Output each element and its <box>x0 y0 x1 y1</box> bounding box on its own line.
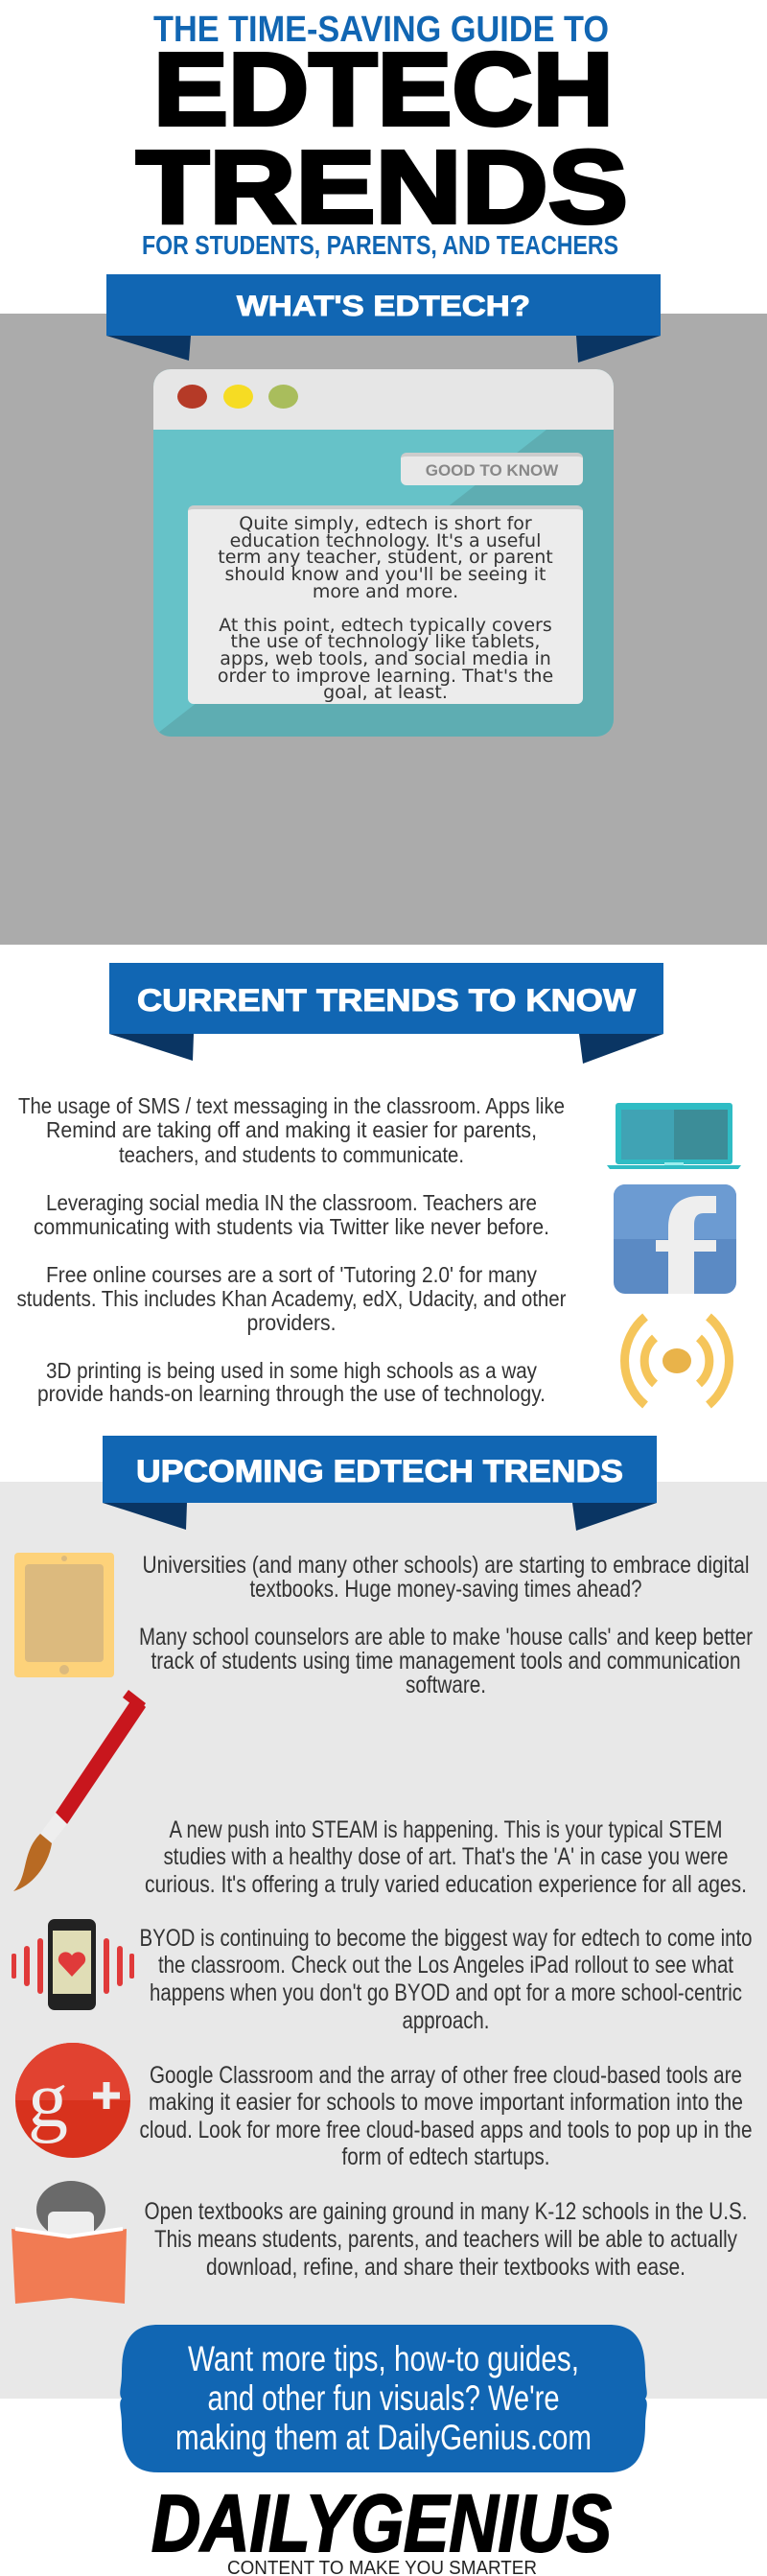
text box: definition: more and more. <box>313 581 458 602</box>
callout: DailyGenius CTA <box>120 2325 647 2472</box>
text: current trends <box>17 1093 567 1406</box>
text: house calls <box>139 1624 753 1698</box>
text box: definition <box>188 505 583 704</box>
banner: upcoming trends: UPCOMING EDTECH TRENDS <box>136 1454 623 1488</box>
icon: paint brush <box>13 1690 146 1891</box>
title: EDTECH <box>153 31 614 147</box>
icon: person reading <box>12 2181 127 2304</box>
text box: definition: the use of technology like tablets, <box>231 631 540 652</box>
text box: definition: term any teacher, student, or parent <box>218 547 553 568</box>
icon: google plus <box>15 2043 130 2158</box>
banner: what's edtech <box>106 274 661 363</box>
title: THE TIME-SAVING GUIDE TO <box>153 10 609 50</box>
text: SMS: Remind are taking off and making it easier for parents, <box>46 1117 537 1142</box>
text box: definition: goal, at least. <box>323 682 448 703</box>
icon: phone with heart <box>12 1919 134 2010</box>
browser top bar with dots <box>153 369 614 430</box>
text box: definition: At this point, edtech typically covers <box>219 615 552 636</box>
text box: definition: education technology. It's a useful <box>230 530 541 551</box>
background: light gray band upcoming <box>0 1482 767 2399</box>
text: online courses: Free online courses are a sort of 'Tutoring 2.0' for many <box>46 1262 537 1287</box>
callout: DailyGenius CTA: and other fun visuals? We're <box>207 2378 560 2418</box>
text: digital textbooks <box>142 1552 750 1603</box>
text box: definition: order to improve learning. That's the <box>218 666 553 687</box>
text: social media: Leveraging social media IN the classroom. Teachers are <box>46 1190 537 1215</box>
title <box>135 10 628 260</box>
text: 3D printing: provide hands-on learning through the use of technology. <box>37 1381 546 1406</box>
icon: wireless signal <box>620 1314 733 1408</box>
title: TRENDS <box>136 129 628 245</box>
tag: good to know: GOOD TO KNOW <box>426 461 558 480</box>
icon: facebook <box>614 1184 736 1294</box>
text: online courses <box>17 1262 567 1335</box>
text: digital textbooks: textbooks. Huge money-saving times ahead? <box>249 1576 642 1603</box>
icon: laptop <box>607 1103 741 1169</box>
text box: definition: should know and you'll be seeing it <box>225 564 546 585</box>
text: SMS: teachers, and students to communicate. <box>119 1142 464 1167</box>
text: online courses: providers. <box>247 1310 336 1335</box>
text: house calls: software. <box>406 1672 486 1698</box>
banner: what's edtech: WHAT'S EDTECH? <box>237 291 530 322</box>
text: social media <box>34 1190 549 1239</box>
text: Google Classroom: form of edtech startups. <box>341 2143 550 2170</box>
text: 3D printing <box>37 1358 546 1406</box>
text: open textbooks <box>144 2198 748 2281</box>
text: social media: communicating with students via Twitter like never before. <box>34 1214 549 1239</box>
text: BYOD <box>140 1925 752 2034</box>
banner: current trends: CURRENT TRENDS TO KNOW <box>137 983 637 1018</box>
tag: good to know <box>401 453 583 485</box>
icon: tablet <box>14 1553 114 1677</box>
text: BYOD: approach. <box>403 2007 489 2034</box>
text box: definition: Quite simply, edtech is short for <box>239 513 532 534</box>
background: gray band what's edtech <box>0 314 767 945</box>
text box: definition: apps, web tools, and social media in <box>220 648 551 669</box>
banner: upcoming trends <box>103 1436 657 1531</box>
text: open textbooks: download, refine, and share their textbooks with ease. <box>206 2254 686 2281</box>
text: SMS <box>18 1093 565 1167</box>
panel: browser window <box>153 369 614 737</box>
text: Google Classroom <box>140 2062 752 2170</box>
text: 3D printing: 3D printing is being used in some high schools as a way <box>46 1358 537 1383</box>
text: upcoming trends <box>139 1552 753 2281</box>
title: FOR STUDENTS, PARENTS, AND TEACHERS <box>142 230 618 260</box>
text: STEAM <box>145 1816 747 1898</box>
icon: google plus: g <box>28 2055 68 2144</box>
banner: current trends <box>109 963 663 1064</box>
